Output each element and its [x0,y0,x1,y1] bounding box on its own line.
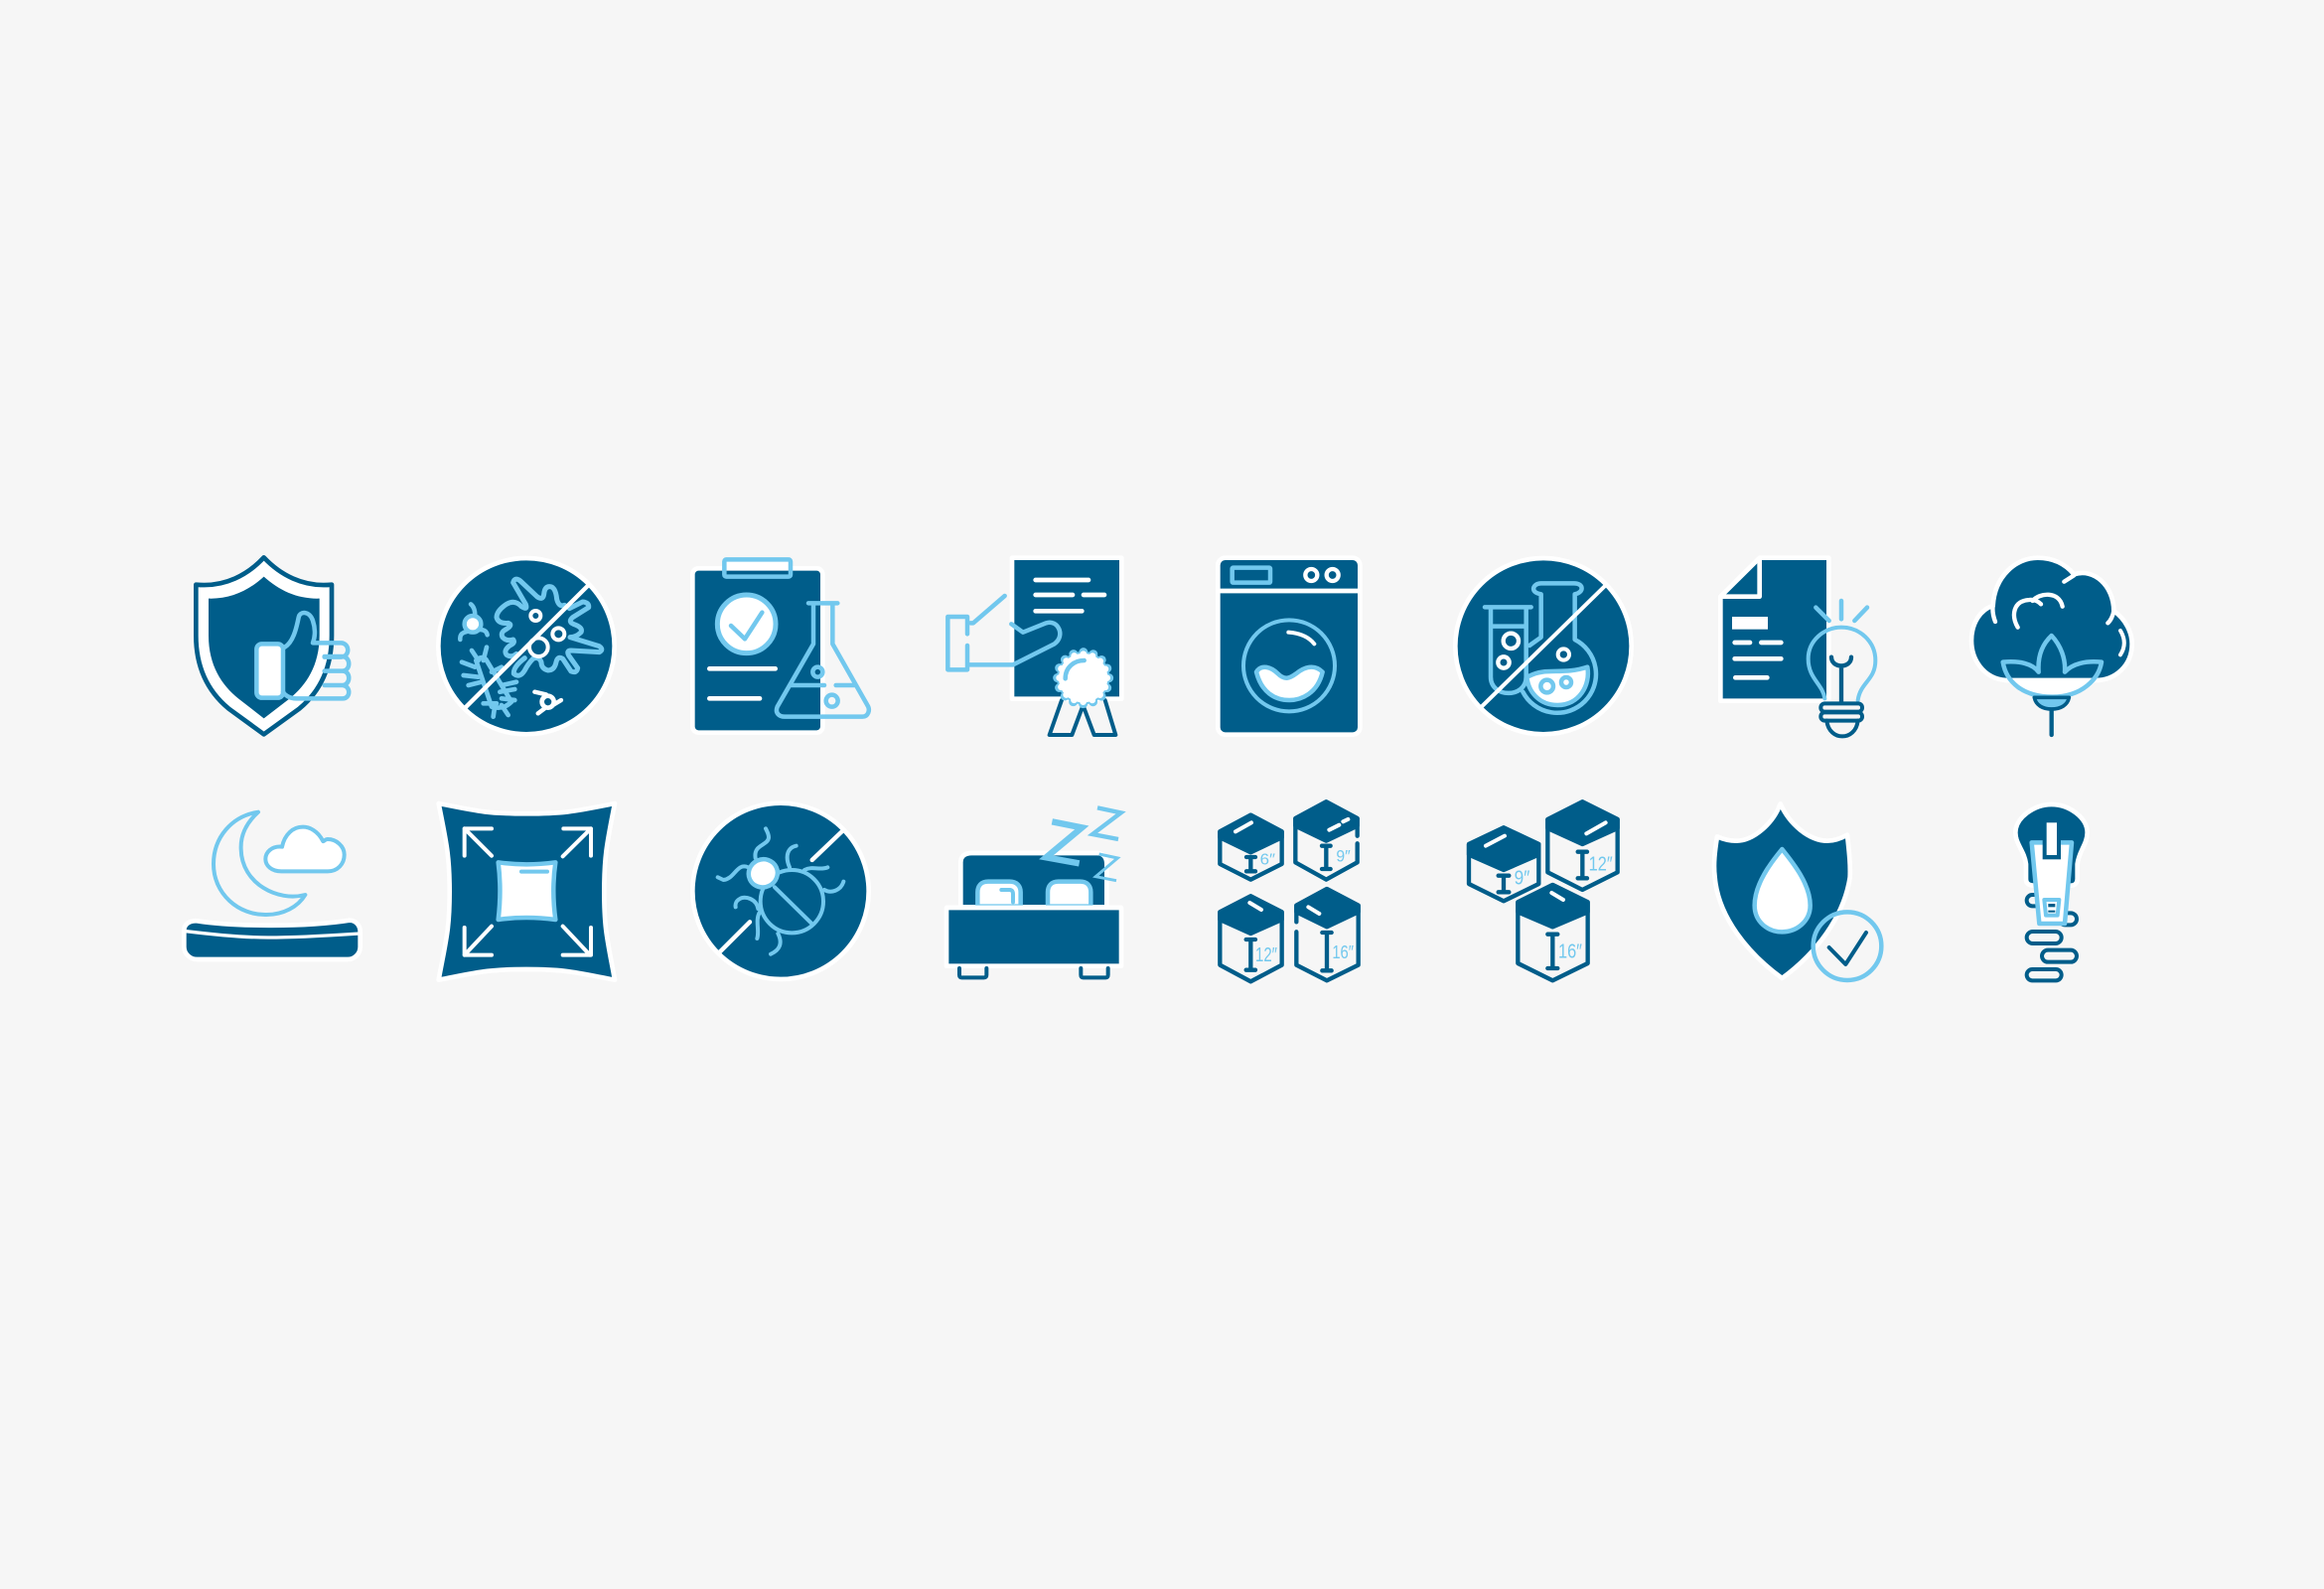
icon: clipboard with lab flask [692,559,869,733]
icon: cotton flower [1971,558,2132,735]
cube: 16 inch: 16″ [1558,940,1582,962]
icon: pillow with expand arrows [439,803,615,980]
icon: document with light bulb [1720,558,1875,736]
icon: no bed bugs [692,803,869,979]
icon: shield with thumbs up [196,557,349,734]
cube: 12 inch: 12″ [1255,944,1277,966]
cube: 12 inch [1220,896,1282,981]
icon: no chemicals [1455,558,1632,734]
cube: 6 inch: 6″ [1260,851,1276,868]
icon: zipper [2015,804,2088,980]
icon: certificate held in hand [947,558,1121,735]
cube: 9 inch: 9″ [1515,868,1529,890]
icon: waterproof shield with check [1714,803,1881,980]
cube: 16 inch [1296,889,1359,980]
icon: three mattress heights [1469,801,1618,980]
cube: 12 inch [1547,801,1618,890]
icon: no germs [438,558,615,734]
icon: moon, cloud and mattress [184,812,361,959]
cube: 9 inch [1295,801,1358,880]
cube: 16 inch: 16″ [1332,941,1354,962]
icon: four mattress heights [1220,801,1359,981]
cube: 16 inch [1518,885,1588,980]
cube: 12 inch: 12″ [1589,853,1613,876]
cube: 9 inch [1469,827,1538,901]
icon: washing machine [1218,558,1360,735]
icon: bed with sleep letters [946,807,1121,977]
cube: 6 inch [1220,815,1282,880]
cube: 9 inch: 9″ [1336,846,1351,865]
